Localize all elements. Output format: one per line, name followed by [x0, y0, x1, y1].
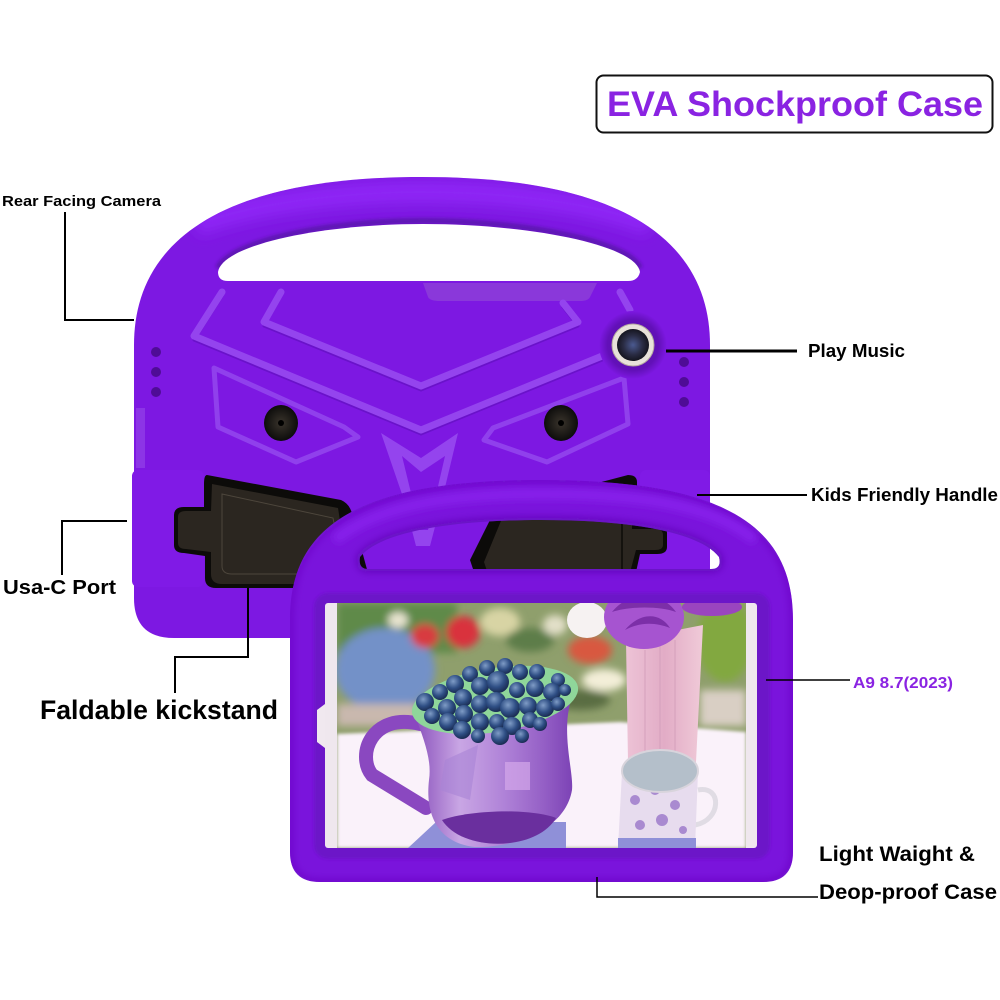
- port notch: [317, 704, 325, 748]
- kickstand right: [470, 475, 667, 590]
- label: light weight: [819, 843, 997, 904]
- photo background: [337, 603, 746, 848]
- label: kids friendly handle: Kids Friendly Handle: [811, 485, 998, 505]
- panel: front view of case: [290, 480, 793, 882]
- left eye: [214, 368, 358, 462]
- center emblem: [381, 433, 458, 546]
- callout line: model: [766, 679, 850, 681]
- front case shading: [290, 480, 793, 882]
- speaker holes right: [679, 357, 689, 407]
- right eye: [484, 378, 628, 462]
- kickstand left: [174, 475, 372, 588]
- callout line: rear facing camera: [65, 212, 134, 320]
- callout line: kids friendly handle: [697, 494, 807, 496]
- right strap: [640, 470, 710, 587]
- speaker holes left: [151, 347, 161, 397]
- table cloth: [337, 722, 746, 848]
- label: kickstand: Faldable kickstand: [40, 695, 278, 725]
- callout line: kickstand: [175, 588, 248, 693]
- handle opening: [218, 224, 640, 281]
- icon: left knob: [264, 405, 298, 441]
- blurred garden: [335, 598, 753, 726]
- rear case body: [134, 177, 710, 638]
- white flower: [567, 602, 607, 638]
- title: [596, 76, 992, 132]
- mug: [366, 655, 583, 847]
- front case body: [290, 480, 793, 882]
- label: rear facing camera: Rear Facing Camera: [2, 193, 162, 210]
- callout line: play music: [666, 350, 797, 352]
- rose: [604, 603, 742, 649]
- camera: [599, 311, 667, 379]
- label: usa-c port: Usa-C Port: [3, 577, 116, 599]
- screen recess: [314, 593, 770, 859]
- icon: right knob: [544, 405, 578, 441]
- rear case shading: [136, 192, 650, 468]
- callout line: light weight: [597, 877, 818, 897]
- embossed chevrons: [194, 292, 630, 434]
- title: EVA Shockproof Case: [607, 85, 983, 124]
- tablet screen: [325, 603, 757, 848]
- tea cup: [618, 750, 716, 848]
- label: play music: Play Music: [808, 341, 905, 361]
- vase: [626, 625, 703, 762]
- panel: rear view of case: [132, 177, 710, 638]
- blueberries: [416, 658, 571, 745]
- blue shadow on table: [408, 822, 566, 848]
- photo on screen: [335, 585, 753, 848]
- label: light weight: Light Waight &: [819, 843, 975, 866]
- handle inner shadow: [218, 221, 640, 268]
- label: model: A9 8.7(2023): [853, 675, 953, 692]
- camera slot: [423, 283, 597, 301]
- label: light weight: Deop-proof Case: [819, 881, 997, 904]
- callout line: usa-c port: [62, 521, 127, 575]
- left strap: [132, 470, 204, 587]
